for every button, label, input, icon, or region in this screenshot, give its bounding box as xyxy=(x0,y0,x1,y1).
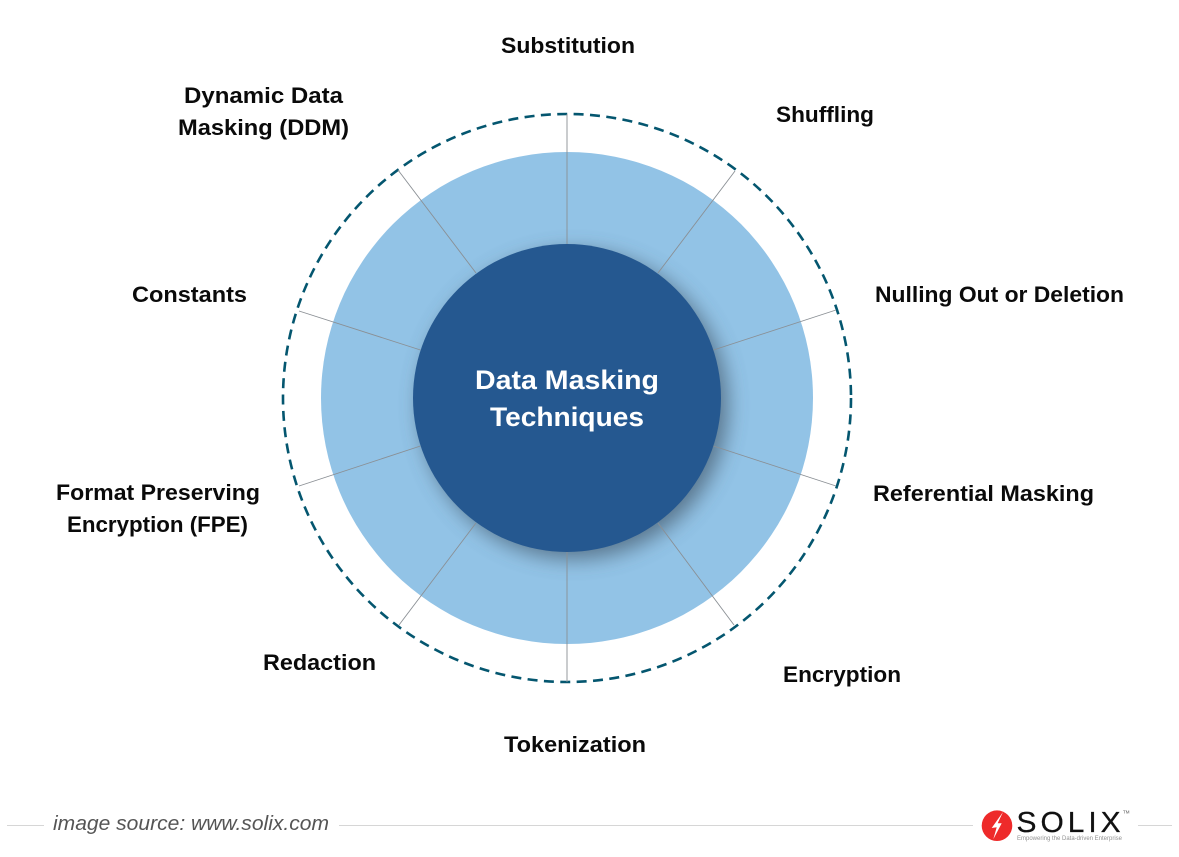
label: Format Preserving Encryption (FPE): Format Preserving xyxy=(56,480,260,505)
label: Dynamic Data Masking (DDM): Masking (DDM) xyxy=(178,115,349,140)
label: Format Preserving Encryption (FPE): Encryption (FPE) xyxy=(67,512,248,537)
center circle shadow xyxy=(420,251,728,559)
SOLIX logo: TM xyxy=(1123,810,1130,814)
label: Nulling Out or Deletion: Nulling Out or Deletion xyxy=(875,282,1124,307)
light blue ring xyxy=(321,152,813,644)
label: Substitution: Substitution xyxy=(501,33,635,58)
label: Tokenization: Tokenization xyxy=(504,732,646,757)
label: Shuffling: Shuffling xyxy=(776,102,874,127)
footer rules xyxy=(7,824,1172,826)
segment divider lines xyxy=(299,114,836,682)
logo tagline: Empowering the Data-driven Enterprise xyxy=(1017,835,1122,842)
label: Format Preserving Encryption (FPE) xyxy=(56,480,260,537)
center title: Techniques xyxy=(490,402,644,432)
logo wordmark: SOLIX xyxy=(1016,808,1125,839)
label: Referential Masking: Referential Masking xyxy=(873,481,1094,506)
label: Dynamic Data Masking (DDM): Dynamic Data xyxy=(184,83,344,108)
label: Encryption: Encryption xyxy=(783,662,901,687)
dashed outer ring xyxy=(283,114,851,682)
center title: Data Masking xyxy=(475,365,659,395)
label: Dynamic Data Masking (DDM) xyxy=(178,83,349,140)
center circle xyxy=(413,244,721,552)
SOLIX logo xyxy=(982,808,1130,842)
label: Redaction: Redaction xyxy=(263,650,376,675)
label: Constants: Constants xyxy=(132,282,247,307)
center title xyxy=(475,365,659,432)
icon: red bolt circle xyxy=(982,810,1012,841)
image source credit: image source: www.solix.com xyxy=(53,813,329,835)
